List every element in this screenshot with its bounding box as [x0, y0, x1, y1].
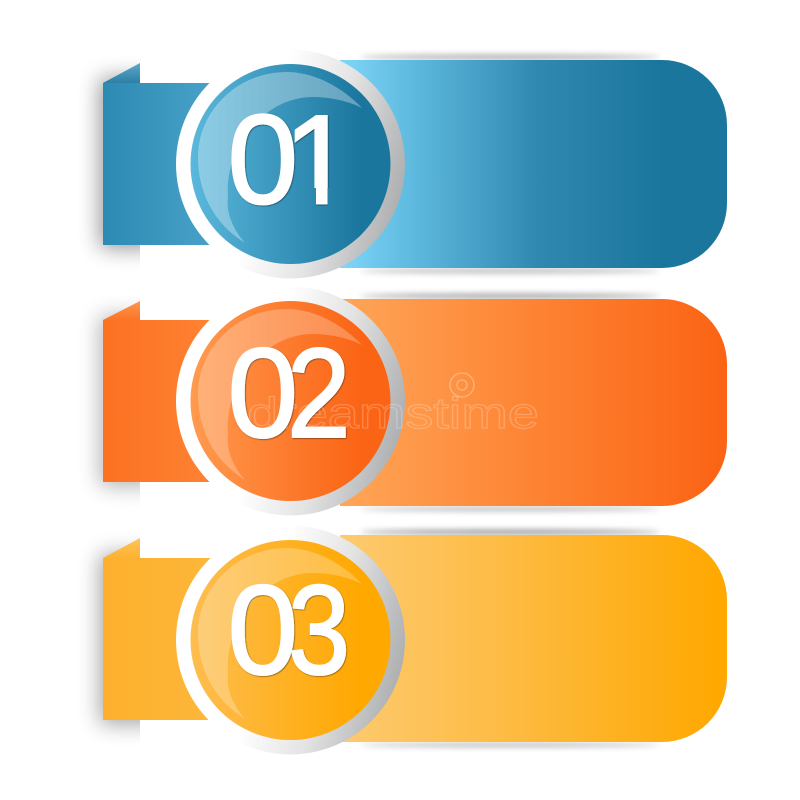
- badge disc: [190, 64, 390, 264]
- ribbon bar: [340, 299, 727, 506]
- badge gloss: [198, 72, 362, 243]
- watermark text: dreamstime: [247, 389, 539, 438]
- number 03: 3: [288, 560, 350, 702]
- badge gloss: [198, 548, 362, 719]
- number 03: 0: [228, 559, 298, 701]
- badge gloss: [198, 309, 362, 480]
- badge disc: [190, 301, 390, 501]
- ribbon tail: [103, 320, 223, 482]
- tail shadow: [100, 78, 160, 248]
- bar shadow: [360, 530, 660, 747]
- ribbon fold: [103, 63, 140, 83]
- number 02: 0: [228, 322, 298, 464]
- number 03: [228, 559, 350, 702]
- ribbon bar: [340, 60, 727, 268]
- ribbon fold: [103, 301, 140, 320]
- number 01: 0: [228, 88, 298, 230]
- number 01: [231, 113, 329, 207]
- tail shadow: [100, 316, 160, 486]
- ribbon bar: [340, 535, 727, 742]
- ribbon fold: [103, 538, 140, 558]
- tail shadow: [100, 554, 160, 724]
- panel: step 02 orange banner: [100, 286, 727, 516]
- bar shadow: [360, 294, 660, 511]
- watermark spiral icon: [450, 373, 474, 397]
- ribbon tail: [103, 558, 223, 720]
- bar shadow: [360, 54, 660, 274]
- panel: step 03 yellow banner: [100, 526, 727, 754]
- ribbon tail: [103, 83, 223, 245]
- number 01: 1: [284, 88, 354, 230]
- watermark: [247, 373, 539, 438]
- number 02: [228, 322, 351, 464]
- number 02: 2: [287, 322, 351, 464]
- badge ring: [176, 50, 405, 278]
- badge ring: [176, 526, 405, 754]
- badge ring: [176, 286, 405, 516]
- badge disc: [190, 540, 390, 740]
- panel: step 01 blue banner: [100, 50, 727, 278]
